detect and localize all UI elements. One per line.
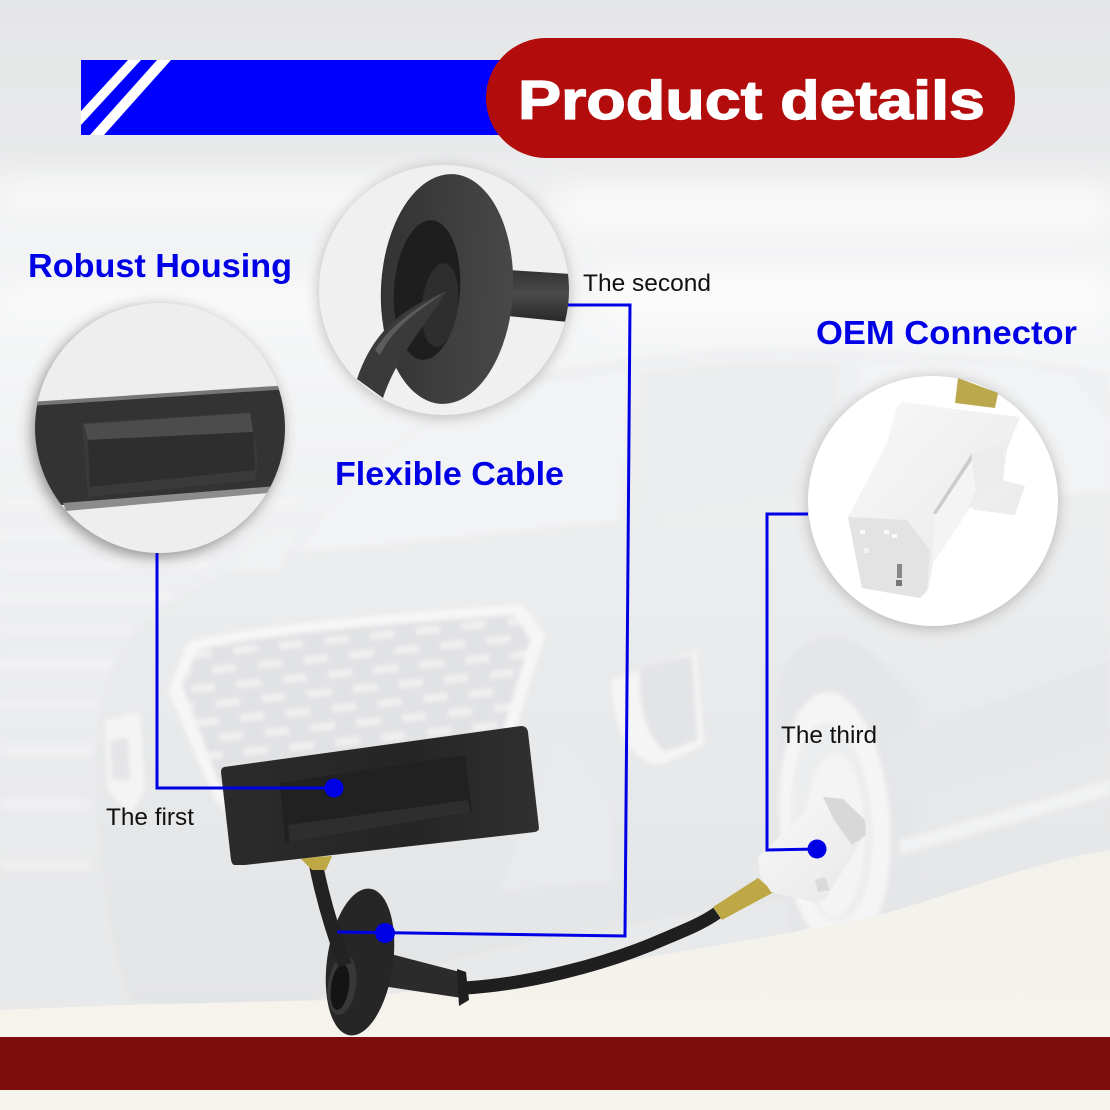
header ribbon: [81, 60, 521, 135]
detail circle: grommet: [319, 165, 570, 417]
label: The first: The first: [106, 804, 194, 831]
heading: Robust Housing: Robust Housing: [28, 247, 292, 284]
callout line: connector: [767, 514, 817, 850]
callout dot: cable: [375, 923, 395, 943]
background car: [97, 348, 1110, 1008]
product: grommet: [317, 884, 403, 1040]
detail circle: connector: [808, 376, 1058, 628]
callout dot: housing: [324, 778, 344, 798]
product: switch housing: [221, 726, 539, 865]
detail circle: housing: [30, 300, 290, 560]
bottom band: [0, 1037, 1110, 1110]
label: The second: The second: [583, 270, 711, 297]
label: The third: The third: [781, 722, 877, 749]
callout line: cable: [337, 305, 630, 936]
product: rear cable: [316, 865, 345, 965]
callout line: housing: [157, 553, 335, 788]
title pill: [486, 38, 1015, 158]
sandy ground: [0, 850, 1110, 1037]
product: cable: [465, 913, 717, 988]
callout dot: connector: [808, 840, 826, 858]
product: gold sleeve short: [300, 856, 332, 870]
product: gold sleeve long: [713, 878, 774, 920]
product: connector: [758, 795, 866, 902]
title pill: Product details: [518, 69, 985, 131]
product: grommet stem: [375, 950, 469, 1006]
heading: Flexible Cable: Flexible Cable: [335, 455, 564, 492]
heading: OEM Connector: OEM Connector: [816, 314, 1077, 351]
